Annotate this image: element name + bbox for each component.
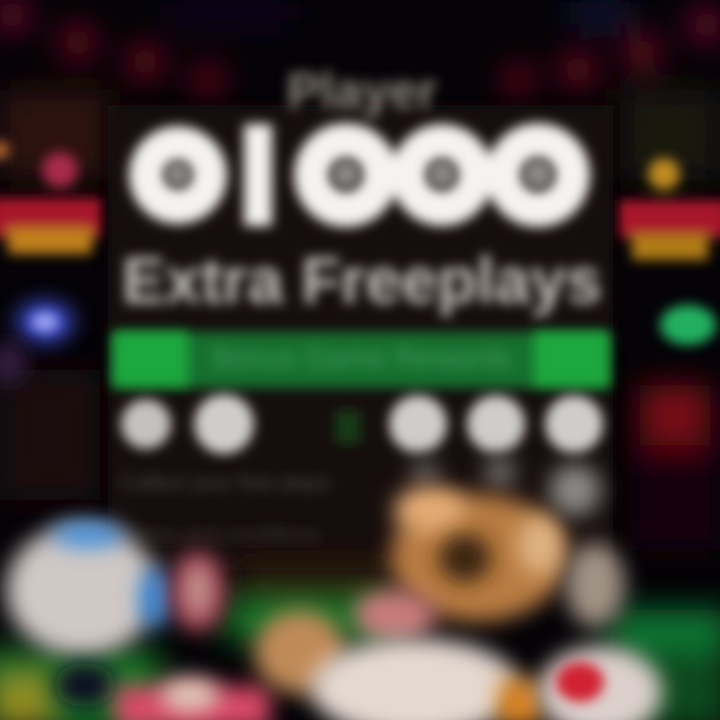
- text lines: Collect your free plays: [120, 470, 330, 495]
- title: Player: [287, 63, 437, 119]
- green banner: Bonus Game Rewards: [212, 342, 512, 373]
- table floor: [0, 568, 720, 720]
- text lines: [120, 470, 330, 547]
- hamster figure: [254, 486, 625, 720]
- lower right circles: [411, 456, 601, 516]
- background glow lights: [0, 0, 720, 550]
- large toy ball left: [6, 523, 270, 720]
- right side sign: [618, 158, 720, 345]
- left side sign: [0, 141, 102, 382]
- text lines: Terms and conditions: [120, 522, 320, 547]
- subtitle: Extra Freeplays: [122, 243, 602, 317]
- circle row: [121, 394, 603, 454]
- big number 01000: [147, 124, 572, 226]
- small toy ball right: [538, 646, 662, 720]
- green banner: [112, 332, 610, 388]
- central panel: [108, 105, 613, 570]
